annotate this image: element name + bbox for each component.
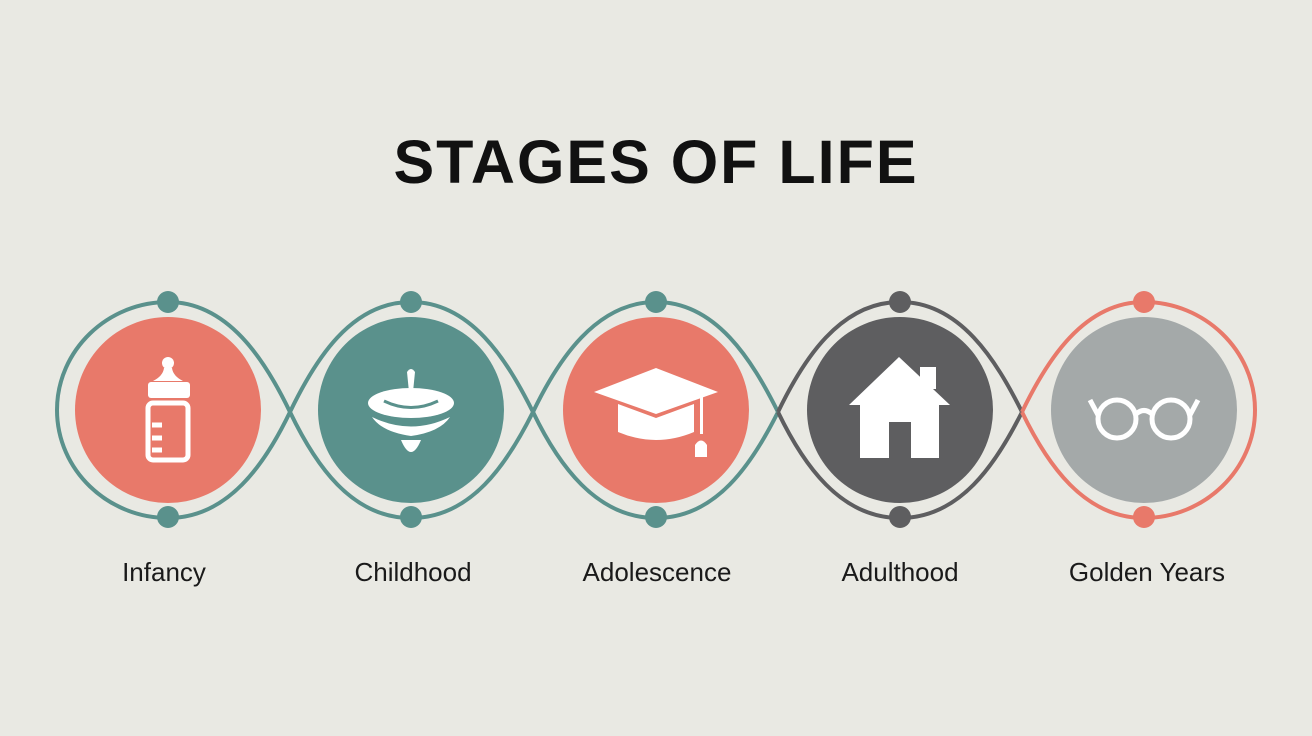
label: adolescence: Adolescence — [583, 557, 731, 587]
icon: spinning top — [368, 369, 454, 452]
stage 2: childhood — [290, 291, 533, 528]
stage 3: adolescence — [533, 291, 778, 528]
label: childhood: Childhood — [354, 557, 472, 587]
stage 4: adulthood — [778, 291, 1022, 528]
label: infancy: Infancy — [122, 557, 206, 587]
stage 5: golden years — [1022, 291, 1255, 528]
icon: house — [849, 357, 950, 458]
icon: glasses — [1090, 400, 1198, 438]
label: adulthood: Adulthood — [841, 557, 959, 587]
icon: graduation cap — [594, 368, 718, 457]
label: golden years: Golden Years — [1069, 557, 1225, 587]
icon: baby bottle — [148, 403, 188, 460]
title: STAGES OF LIFE — [393, 128, 919, 196]
stage 1: infancy — [57, 291, 290, 528]
